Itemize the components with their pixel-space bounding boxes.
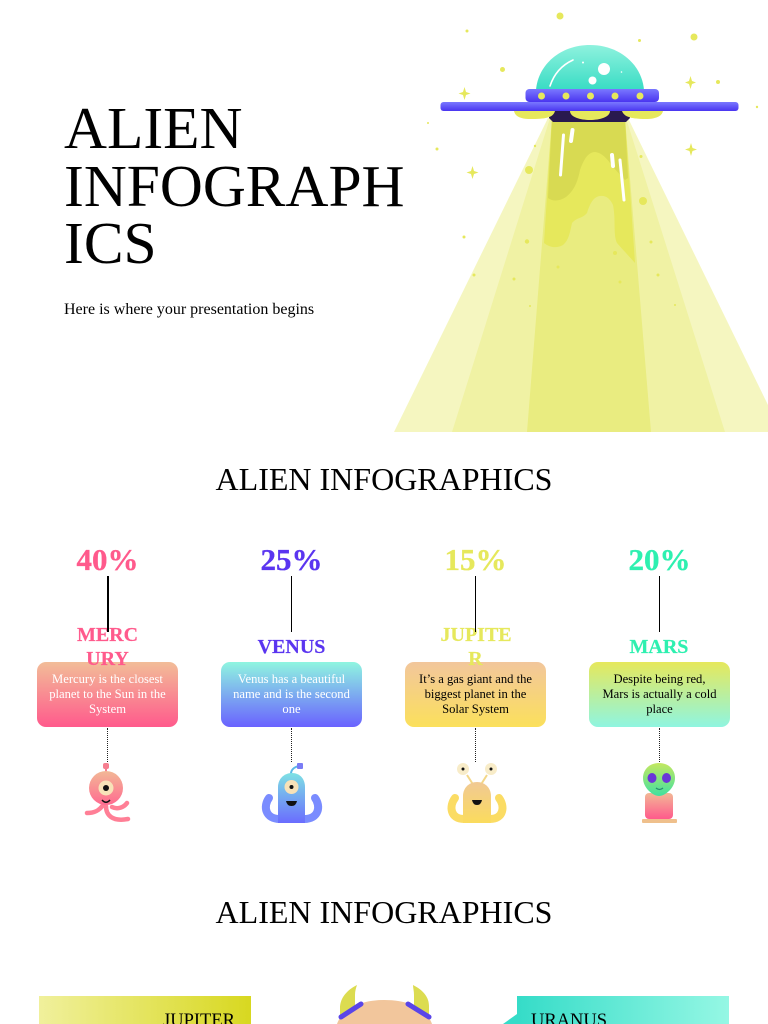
jupiter description: It’s a gas giant and the biggest planet in the Solar System bbox=[419, 672, 532, 716]
mars name: MARS bbox=[630, 636, 688, 658]
icon: horned alien head bbox=[337, 985, 432, 1024]
ufo streaks bbox=[560, 130, 624, 200]
mercury connector bbox=[107, 576, 109, 632]
mars description: Despite being red, Mars is actually a cold place bbox=[602, 672, 716, 716]
panel: uranus banner bbox=[503, 996, 729, 1024]
venus description: Venus has a beautiful name and is the second one bbox=[233, 672, 350, 716]
venus dotted connector bbox=[291, 728, 292, 762]
icon: octopus alien bbox=[84, 763, 130, 822]
panel: jupiter banner bbox=[39, 996, 251, 1024]
mercury percentage: 40% bbox=[76, 542, 138, 577]
uranus banner shape bbox=[517, 996, 729, 1024]
mercury description: Mercury is the closest planet to the Sun in the System bbox=[49, 672, 166, 716]
stars bbox=[427, 12, 758, 307]
jupiter description bbox=[405, 662, 546, 727]
uranus banner pointer bbox=[503, 1014, 517, 1024]
title: ALIEN INFOGRAPH bbox=[64, 95, 405, 218]
section heading 1: ALIEN INFOGRAPHICS bbox=[216, 461, 552, 497]
icon: yellow stalk-eyed alien bbox=[448, 763, 506, 823]
title bbox=[64, 95, 405, 276]
mercury name: MERC bbox=[77, 624, 138, 646]
light beam bbox=[394, 118, 768, 432]
title: ICS bbox=[64, 210, 157, 276]
mars percentage: 20% bbox=[628, 542, 690, 577]
section heading 2: ALIEN INFOGRAPHICS bbox=[216, 894, 552, 930]
jupiter connector bbox=[475, 576, 476, 632]
mars connector bbox=[659, 576, 660, 632]
mercury description bbox=[37, 662, 178, 727]
subtitle: Here is where your presentation begins bbox=[64, 301, 314, 318]
jupiter name: JUPITE bbox=[440, 624, 512, 646]
icon: green alien bust bbox=[642, 763, 677, 823]
jupiter name: R bbox=[468, 648, 483, 670]
ufo illustration with beam and stars bbox=[394, 12, 768, 432]
mercury name bbox=[77, 624, 138, 670]
jupiter percentage: 15% bbox=[444, 542, 506, 577]
mercury name: URY bbox=[86, 648, 129, 670]
jupiter name bbox=[440, 624, 512, 670]
jupiter dotted connector bbox=[475, 728, 476, 762]
ufo body bbox=[440, 45, 738, 122]
icon: blue one-eyed alien bbox=[262, 763, 322, 823]
mars dotted connector bbox=[659, 728, 660, 762]
mercury dotted connector bbox=[107, 728, 108, 762]
venus name: VENUS bbox=[258, 636, 325, 658]
venus percentage: 25% bbox=[260, 542, 322, 577]
venus description bbox=[221, 662, 362, 727]
mars description bbox=[589, 662, 730, 727]
venus connector bbox=[291, 576, 292, 632]
